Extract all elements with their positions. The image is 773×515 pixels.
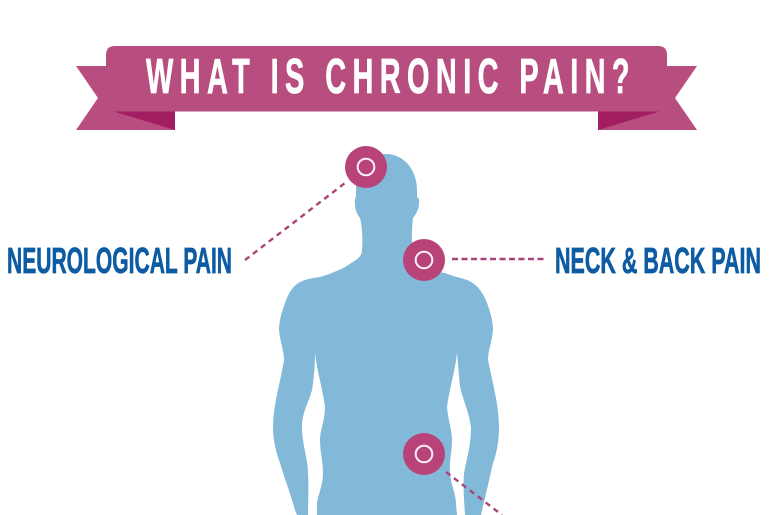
- pain marker: head: [345, 146, 387, 188]
- banner main band: [106, 46, 667, 112]
- banner left tail: [76, 66, 175, 130]
- pain marker: lower abdomen: [403, 433, 445, 475]
- dashed line: neurological: [245, 183, 345, 260]
- banner right fold: [598, 111, 661, 130]
- banner: [76, 46, 697, 130]
- label: neurological pain: NEUROLOGICAL PAIN: [7, 240, 232, 281]
- body silhouette: [273, 154, 499, 515]
- pain marker: neck: [403, 239, 445, 281]
- banner right tail: [598, 66, 697, 130]
- dashed line: lower back: [446, 472, 502, 515]
- dashed line: neck and back: [452, 258, 546, 260]
- banner left fold: [112, 111, 175, 130]
